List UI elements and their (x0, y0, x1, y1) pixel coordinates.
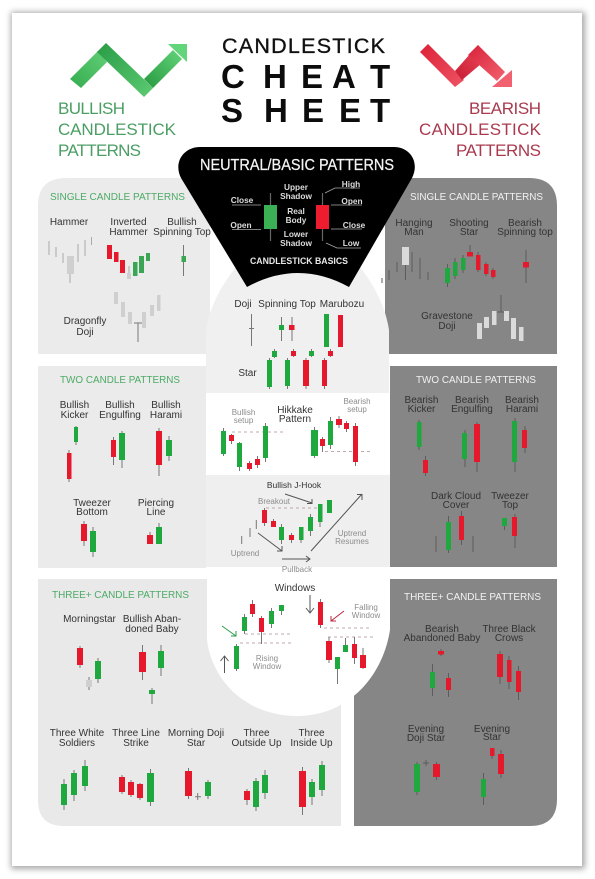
pattern: tweezer bottom (73, 498, 112, 557)
pattern: evening doji star (407, 724, 446, 795)
heading: bullish candlestick patterns (58, 99, 177, 160)
bullish anatomy candle (230, 193, 277, 241)
panel: bullish three candle background (38, 579, 341, 826)
pattern: bullish kicker: Kicker (61, 410, 89, 421)
panel: bullish single candle patterns (49, 192, 211, 342)
pattern: bearish setup: Bearish (343, 397, 371, 406)
pattern: bullish kicker (60, 400, 89, 482)
anatomy labels: Body (286, 215, 307, 225)
pattern: bearish harami (505, 395, 539, 472)
panel: bearish single candle patterns (382, 192, 553, 341)
panel: j-hook background (206, 475, 390, 567)
pattern: bearish abandoned baby: Bearish (425, 624, 459, 635)
pattern: dark cloud cover: Cover (443, 500, 470, 511)
pattern: dark cloud cover: Dark Cloud (431, 491, 481, 502)
pattern: bullish abandoned baby: doned Baby (125, 624, 179, 635)
pattern: piercing line: Piercing (138, 498, 174, 509)
panel: bearish single candle patterns: SINGLE CANDLE PATTERNS (410, 192, 543, 203)
pattern: bullish setup (221, 408, 283, 471)
panel: centre basic patterns (234, 299, 364, 389)
pattern: bullish setup: Bullish (232, 408, 255, 417)
icon: bullish green arrow (70, 43, 187, 97)
pattern: dark cloud cover (431, 491, 481, 553)
pattern: bearish spinning top (497, 218, 553, 283)
pattern: morning doji star: Star (187, 738, 206, 749)
pattern: three white soldiers: Soldiers (59, 738, 95, 749)
pattern: three outside up: Three (243, 728, 270, 739)
panel: bullish three candle patterns (50, 590, 333, 815)
pattern: hanging man: Hanging (395, 218, 433, 229)
title (221, 34, 390, 129)
pattern: piercing line: Line (147, 507, 166, 518)
pattern: inverted hammer: Hammer (109, 227, 148, 238)
panel: neutral basic patterns (178, 147, 415, 287)
pattern: bearish abandoned baby: Abandoned Baby (404, 633, 480, 644)
pattern: tweezer top: Top (502, 500, 518, 511)
bearish anatomy candle: Close (343, 220, 366, 230)
pattern: bearish kicker: Bearish (405, 395, 438, 406)
anatomy labels: Shadow (280, 238, 312, 248)
title: SHEET (221, 92, 390, 129)
pattern: three outside up: Outside Up (231, 738, 282, 749)
pattern: bullish spinning top: Bullish (167, 217, 197, 228)
pattern: three line strike: Strike (123, 738, 149, 749)
pattern: piercing line (138, 498, 174, 544)
heading: bearish candlestick patterns: CANDLESTICK (419, 120, 542, 139)
pattern: three white soldiers (50, 728, 105, 810)
pattern: three outside up (231, 728, 282, 811)
pattern: rising window (220, 600, 292, 673)
title: CANDLESTICK (222, 34, 386, 58)
pattern: three line strike: Three Line (112, 728, 160, 739)
pattern: star: Star (238, 368, 257, 379)
pattern: bullish spinning top: Spinning Top (153, 227, 211, 238)
pattern: evening star: Star (483, 732, 502, 743)
pattern: rising window: Window (253, 662, 281, 671)
pattern: tweezer top: Tweezer (491, 491, 530, 502)
heading: bearish candlestick patterns: BEARISH (469, 99, 541, 118)
pattern: bullish engulfing (99, 400, 141, 468)
panel: neutral basic patterns: CANDLESTICK BASICS (250, 256, 348, 267)
panel: bullish j-hook: Uptrend (231, 549, 259, 558)
pattern: inverted hammer: Inverted (110, 217, 147, 228)
pattern: evening star: Evening (474, 724, 510, 735)
panel: bullish two candle patterns (60, 375, 182, 557)
pattern: bullish setup: setup (234, 416, 254, 425)
pattern: tweezer bottom: Tweezer (73, 498, 112, 509)
pattern: hanging man: Man (404, 227, 424, 238)
panel: bearish two candle patterns (405, 375, 539, 553)
pattern: bullish harami: Bullish (151, 400, 181, 411)
panel: hikkake pattern: Pattern (279, 414, 311, 425)
pattern: bearish engulfing (451, 395, 493, 472)
pattern: three line strike (112, 728, 160, 806)
bullish anatomy candle: Open (230, 220, 252, 230)
panel: windows: Windows (275, 583, 315, 594)
panel: windows (220, 583, 380, 684)
arrow: green pointer (222, 626, 236, 636)
bearish anatomy candle: Open (341, 196, 363, 206)
heading: bullish candlestick patterns: CANDLESTICK (58, 120, 177, 139)
bearish anatomy candle: Low (343, 238, 360, 248)
panel: hikkake background (206, 393, 390, 475)
pattern: bearish harami: Bearish (505, 395, 539, 406)
panel: bearish three candle patterns (404, 592, 541, 805)
pattern: bearish setup: setup (347, 405, 367, 414)
panel: bullish single candle patterns: SINGLE CANDLE PATTERNS (50, 192, 185, 203)
arrow: down (306, 595, 314, 613)
anatomy labels: Upper (284, 182, 309, 192)
pattern: bearish setup (311, 397, 373, 466)
pattern: gravestone doji: Doji (438, 321, 456, 332)
pattern: dragonfly doji: Dragonfly (64, 316, 106, 327)
pattern: three inside up (290, 728, 333, 815)
pattern: rising window: Rising (256, 654, 278, 663)
pattern: gravestone doji (421, 295, 524, 341)
pattern: bearish kicker (405, 395, 438, 476)
pattern: dragonfly doji: Doji (76, 327, 94, 338)
arrow: uptrend resumes (311, 494, 362, 551)
pattern: bullish spinning top (153, 217, 211, 276)
pattern: gravestone doji: Gravestone (421, 311, 473, 322)
pattern: bearish spinning top: Spinning top (497, 227, 553, 238)
panel: windows background (207, 567, 390, 716)
panel: bearish single candle background (385, 178, 557, 354)
pattern: falling window (306, 595, 380, 684)
anatomy labels: Real (287, 206, 305, 216)
pattern: bullish kicker: Bullish (60, 400, 89, 411)
pattern: shooting star: Shooting (449, 218, 489, 229)
pattern: shooting star: Star (460, 227, 479, 238)
pattern: bearish kicker: Kicker (408, 404, 436, 415)
arrow: pullback horizontal (282, 556, 310, 562)
arrow: up (220, 656, 228, 673)
heading: bullish candlestick patterns: PATTERNS (58, 141, 141, 160)
panel: bullish three candle patterns: THREE+ CANDLE PATTERNS (52, 590, 189, 601)
pattern: tweezer top (491, 491, 530, 548)
pattern: three white soldiers: Three White (50, 728, 105, 739)
panel: bullish j-hook: Bullish J-Hook (267, 480, 322, 490)
pattern: bullish engulfing: Engulfing (99, 410, 141, 421)
panel: bullish j-hook (231, 480, 369, 574)
pattern: bearish harami: Harami (506, 404, 538, 415)
panel: hikkake pattern (221, 397, 373, 471)
pattern: shooting star (445, 218, 496, 287)
anatomy labels (280, 182, 312, 248)
pattern: bullish engulfing: Bullish (105, 400, 135, 411)
pattern: tweezer bottom: Bottom (76, 507, 108, 518)
pattern: dragonfly doji (64, 292, 160, 342)
panel: bullish two candle patterns: TWO CANDLE PATTERNS (60, 375, 180, 386)
pattern: hammer: Hammer (50, 217, 89, 228)
heading: bullish candlestick patterns: BULLISH (58, 99, 125, 118)
pattern: bearish engulfing: Engulfing (451, 404, 493, 415)
pattern: three black crows: Crows (495, 633, 523, 644)
pattern: marubozu: Marubozu (320, 299, 364, 310)
pattern: morning doji star: Morning Doji (168, 728, 224, 739)
panel: bearish two candle patterns: TWO CANDLE PATTERNS (416, 375, 536, 386)
panel: bearish three candle background (354, 579, 557, 826)
panel: bullish single candle background (38, 178, 210, 354)
title: CHEAT (221, 58, 390, 95)
pattern: three inside up: Three (298, 728, 325, 739)
pattern: bullish abandoned baby: Bullish Aban- (123, 614, 181, 625)
panel: bullish two candle background (38, 366, 206, 568)
pattern: three black crows: Three Black (482, 624, 537, 635)
pattern: inverted hammer (107, 217, 150, 279)
pattern: bearish abandoned baby (404, 624, 480, 697)
pattern: falling window: Falling (354, 603, 378, 612)
pattern: morningstar: Morningstar (63, 614, 117, 625)
panel: bearish three candle patterns: THREE+ CANDLE PATTERNS (404, 592, 541, 603)
icon: bearish red arrow (420, 44, 512, 87)
panel: bullish j-hook: Resumes (335, 537, 369, 546)
pattern: bullish abandoned baby (123, 614, 181, 704)
panel: centre arch background (206, 267, 389, 393)
pattern: evening doji star: Doji Star (407, 733, 446, 744)
anatomy labels: Shadow (280, 191, 312, 201)
bullish anatomy candle: Close (231, 195, 254, 205)
pattern: bullish harami (150, 400, 182, 476)
panel: bullish j-hook: Uptrend (338, 529, 366, 538)
heading: bearish candlestick patterns (419, 99, 542, 160)
panel: bearish two candle background (390, 366, 557, 567)
pattern: bullish harami: Harami (150, 410, 182, 421)
pattern: three inside up: Inside Up (290, 738, 333, 749)
anatomy labels: Lower (284, 229, 309, 239)
panel: bullish j-hook: Breakout (258, 497, 291, 506)
bearish anatomy candle: High (342, 179, 360, 189)
pattern: bearish engulfing: Bearish (455, 395, 489, 406)
pattern: spinning top: Spinning Top (258, 299, 316, 310)
heading: bearish candlestick patterns: PATTERNS (456, 141, 541, 160)
arrow: to breakout (285, 494, 312, 504)
pattern: evening star (474, 724, 510, 805)
pattern: three black crows (482, 624, 537, 700)
pattern: morning doji star (168, 728, 224, 800)
arrow: red pointer (331, 611, 344, 621)
pattern: falling window: Window (352, 611, 380, 620)
panel: neutral basic patterns: NEUTRAL/BASIC PATTERNS (200, 157, 394, 174)
pattern: evening doji star: Evening (408, 724, 444, 735)
pattern: hammer (49, 217, 92, 283)
pattern: bearish spinning top: Bearish (508, 218, 542, 229)
arrow: to pullback (258, 533, 282, 551)
panel: hikkake pattern: Hikkake (277, 405, 313, 416)
pattern: doji: Doji (234, 299, 252, 310)
pattern: hanging man (382, 218, 433, 283)
bearish anatomy candle (316, 179, 366, 248)
pattern: morningstar (63, 614, 117, 690)
panel: bullish j-hook: Pullback (282, 565, 313, 574)
